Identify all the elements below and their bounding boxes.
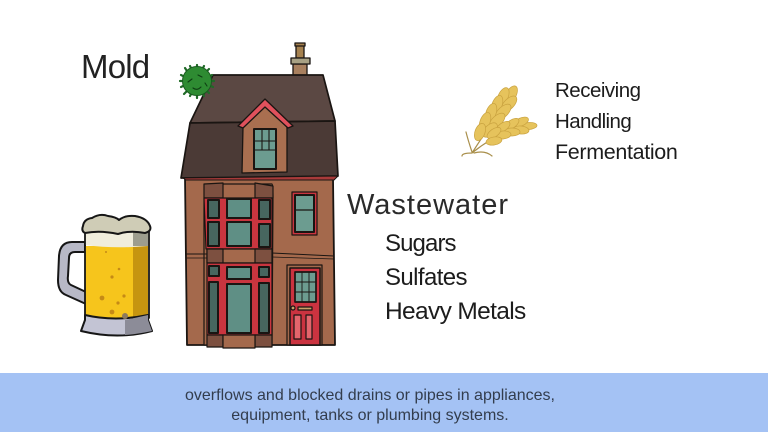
icon: wheat	[462, 84, 537, 156]
icon: mold spore	[180, 65, 214, 98]
bay window frame	[204, 183, 273, 348]
upper right window	[292, 192, 317, 235]
heading: Mold: Mold	[81, 48, 149, 85]
foam head	[82, 215, 150, 234]
Fermentation: Fermentation	[555, 140, 677, 164]
dormer	[238, 99, 293, 173]
icon: beer mug	[58, 215, 152, 336]
bay window panes	[208, 199, 270, 333]
Receiving: Receiving	[555, 79, 641, 102]
mug base	[81, 315, 152, 336]
foam band	[85, 232, 148, 247]
beer	[85, 246, 148, 318]
footer band	[0, 373, 768, 432]
Handling: Handling	[555, 110, 631, 133]
Sugars: Sugars	[385, 230, 456, 257]
walls	[185, 177, 335, 345]
mug handle	[58, 242, 86, 304]
bubbles	[100, 251, 128, 319]
door	[287, 265, 322, 345]
footer text	[185, 387, 555, 424]
list: wastewater contents	[385, 230, 526, 325]
heading: Wastewater: Wastewater	[347, 189, 509, 221]
roof	[181, 75, 338, 180]
list: process steps	[555, 79, 677, 164]
chimney	[291, 43, 310, 76]
Sulfates: Sulfates	[385, 264, 467, 291]
footer text: equipment, tanks or plumbing systems.	[231, 407, 509, 424]
Heavy Metals: Heavy Metals	[385, 298, 526, 325]
icon: house	[181, 43, 338, 348]
string course	[187, 253, 334, 256]
footer text: overflows and blocked drains or pipes in appliances,	[185, 387, 555, 404]
